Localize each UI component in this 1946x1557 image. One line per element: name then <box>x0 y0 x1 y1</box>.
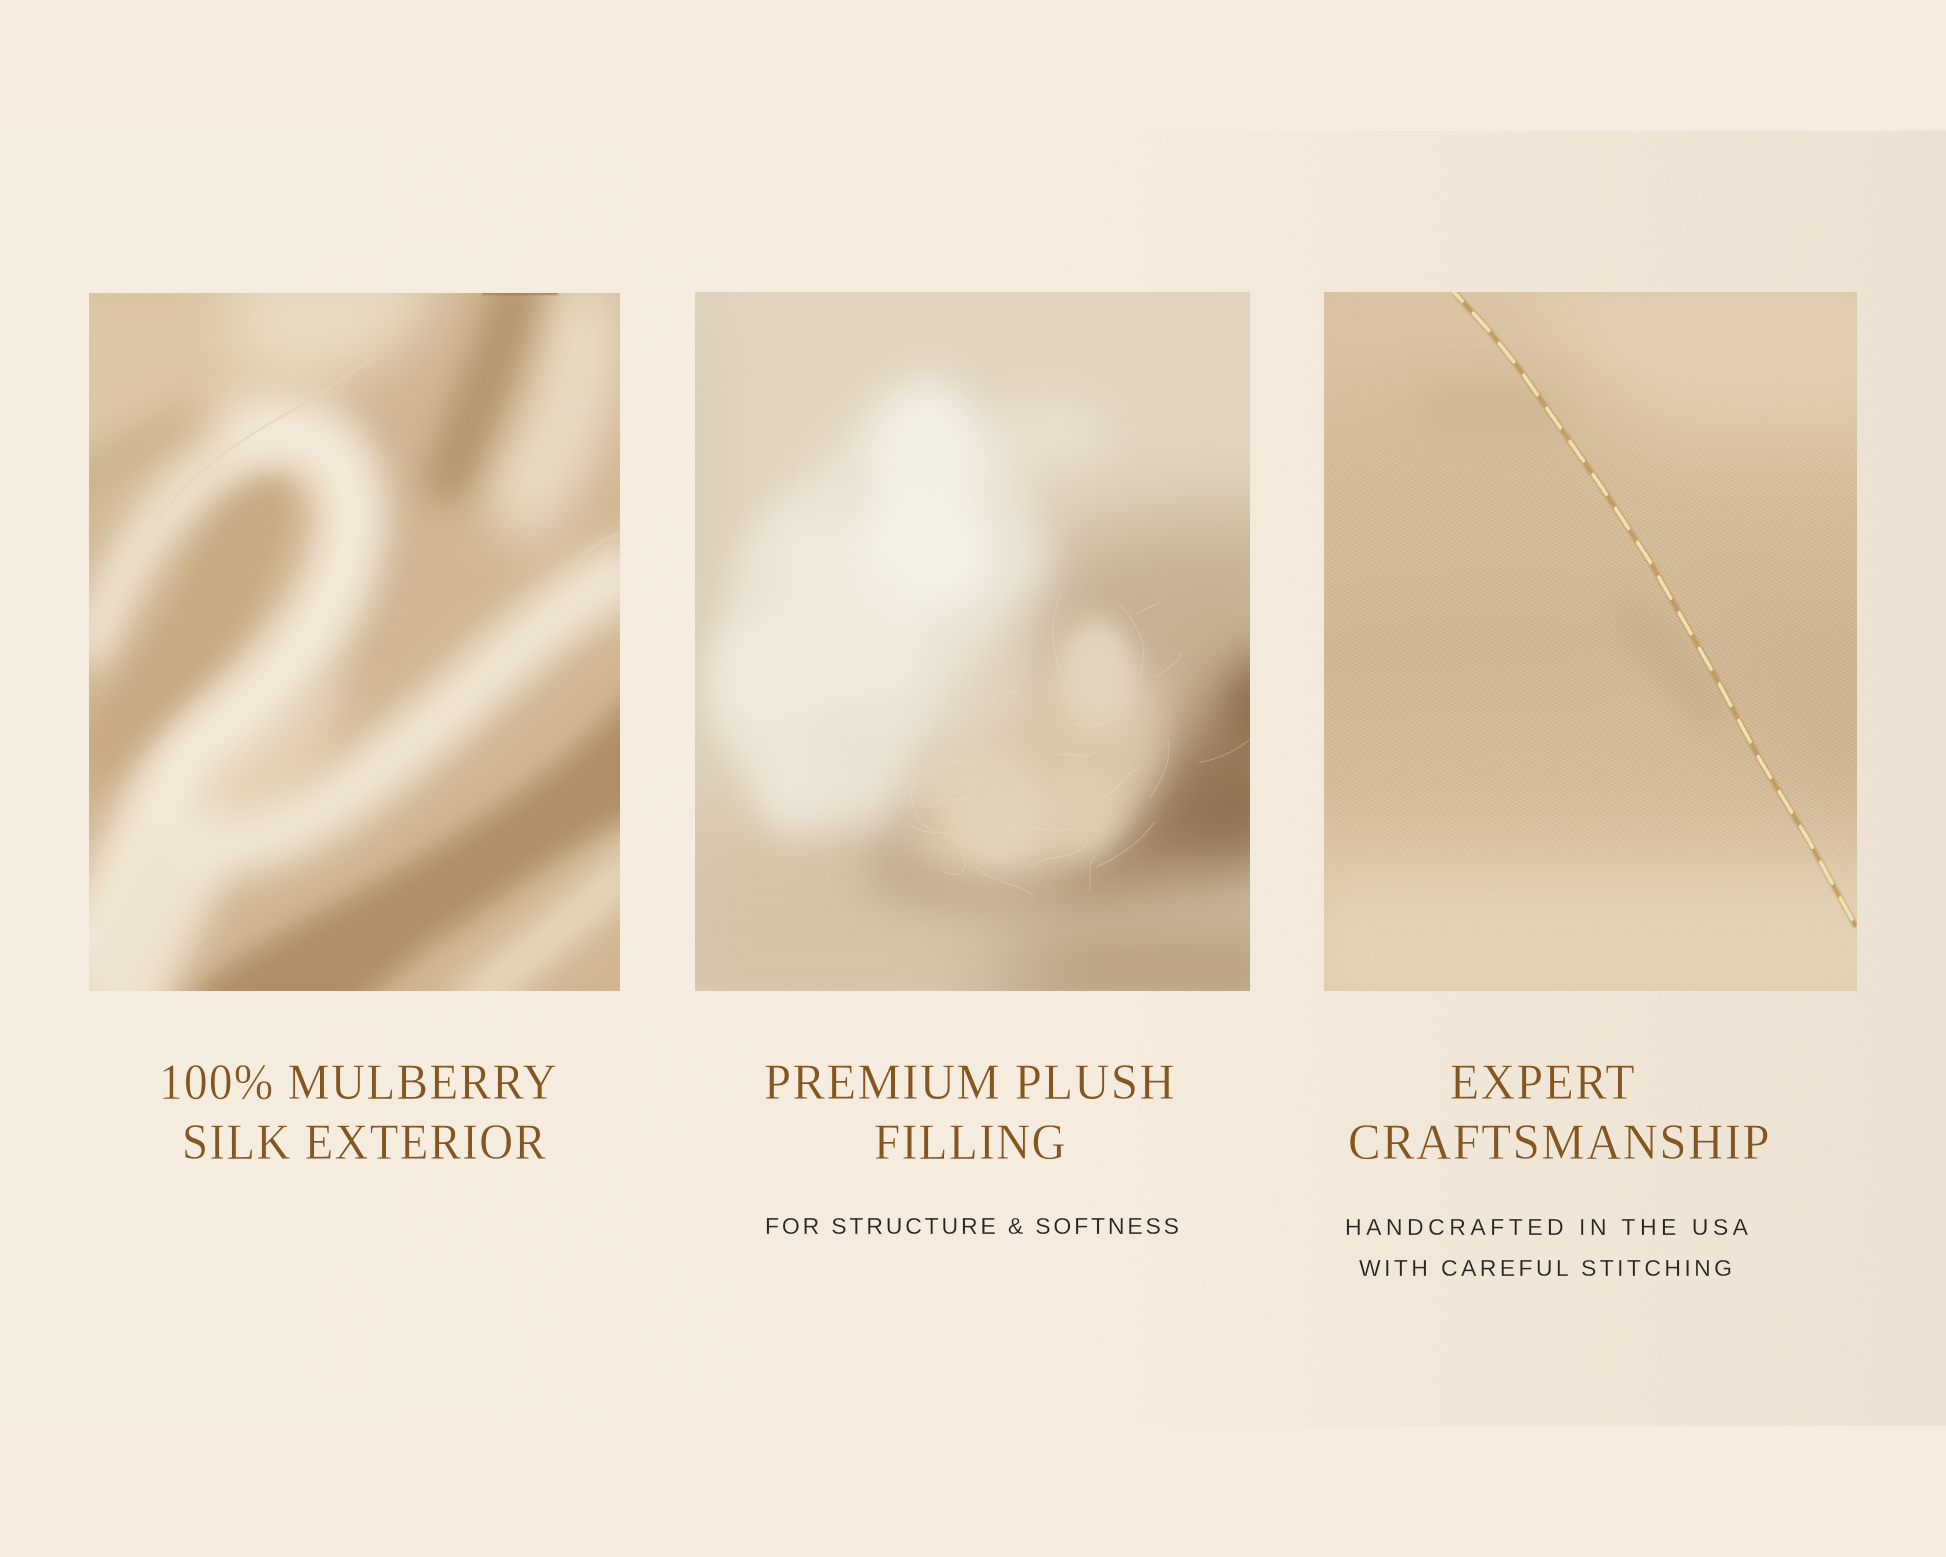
panel: mulberry silk <box>89 293 620 991</box>
caption: handcrafted in the USA with careful stitching: WITH CAREFUL STITCHING <box>1359 1255 1732 1281</box>
heading: premium plush filling: PREMIUM PLUSH <box>764 1055 1176 1111</box>
heading: 100% mulberry silk exterior: 100% MULBERRY <box>159 1055 558 1111</box>
caption: for structure and softness: FOR STRUCTURE & SOFTNESS <box>765 1213 1179 1239</box>
heading: 100% mulberry silk exterior <box>159 1055 558 1171</box>
heading: premium plush filling: FILLING <box>874 1115 1067 1171</box>
heading: premium plush filling <box>764 1055 1176 1171</box>
heading: expert craftsmanship: EXPERT <box>1450 1055 1636 1111</box>
panel: plush filling <box>695 292 1250 991</box>
heading: expert craftsmanship <box>1348 1055 1771 1171</box>
caption: handcrafted in the USA with careful stitching <box>1345 1214 1749 1281</box>
image: fluffy filling <box>695 292 1250 991</box>
heading: 100% mulberry silk exterior: SILK EXTERIOR <box>182 1115 547 1171</box>
caption: handcrafted in the USA with careful stitching: HANDCRAFTED IN THE USA <box>1345 1214 1749 1240</box>
heading: expert craftsmanship: CRAFTSMANSHIP <box>1348 1115 1771 1171</box>
image: silk folds <box>89 293 620 991</box>
panel: expert craftsmanship <box>1324 292 1857 991</box>
image: stitched fabric <box>1324 292 1857 991</box>
